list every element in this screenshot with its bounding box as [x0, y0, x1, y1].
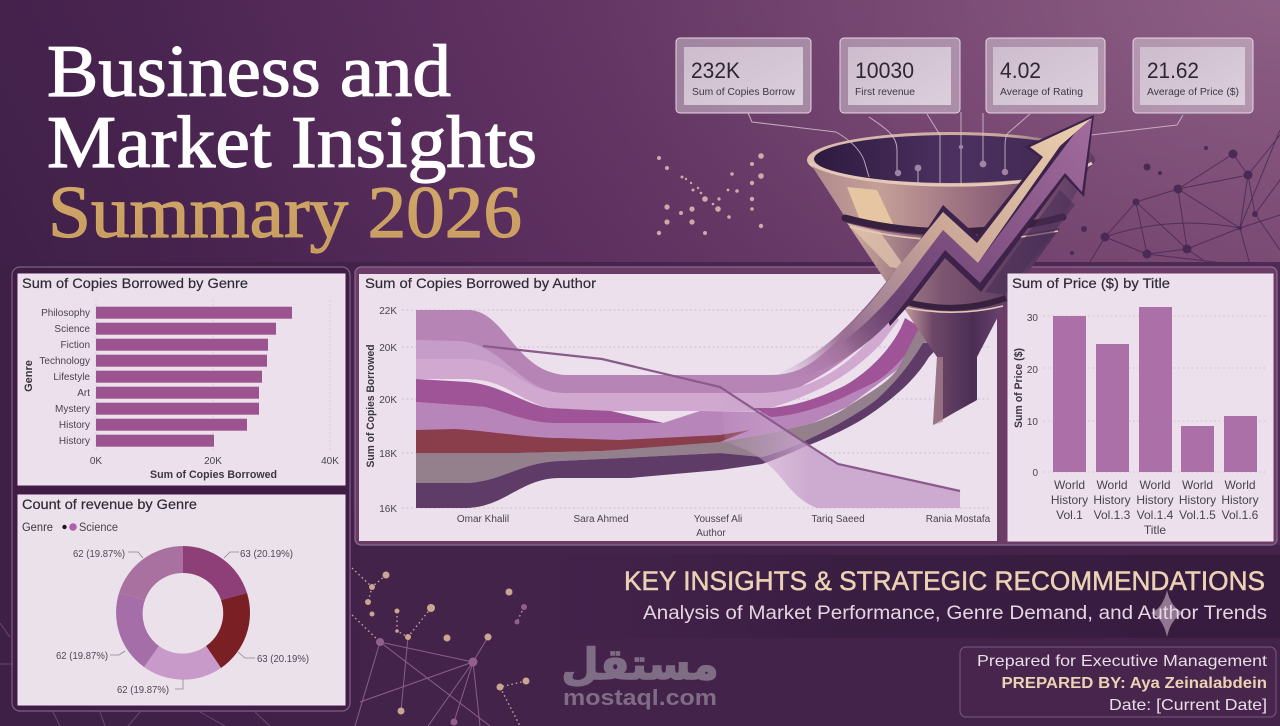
column chart: World — [1096, 478, 1128, 492]
funnel front upper section — [810, 163, 1092, 231]
donut labels: 63 (20.19%) — [257, 653, 309, 665]
legend: Science — [79, 522, 118, 534]
sparkle — [1151, 590, 1184, 637]
key insights heading: KEY INSIGHTS & STRATEGIC RECOMMENDATIONS — [624, 566, 1265, 596]
horizontal bar chart — [23, 300, 339, 481]
column chart: World — [1224, 478, 1256, 492]
KPI: copies borrowed: 232K — [691, 58, 740, 83]
title: Summary 2026 — [48, 172, 522, 254]
horizontal bar chart: Technology — [39, 356, 90, 367]
KPI: average rating: 4.02 — [1000, 58, 1041, 83]
title: Business and — [47, 31, 451, 113]
panel: price by title — [1008, 274, 1273, 541]
watermark: مستقل — [561, 640, 719, 690]
horizontal bar chart: History — [59, 436, 90, 447]
panel: copies borrowed by genre — [18, 274, 345, 485]
column chart: Vol.1.6 — [1222, 508, 1259, 522]
legend — [22, 522, 118, 534]
donut labels: 62 (19.87%) — [73, 548, 125, 560]
horizontal bar chart: Genre — [23, 360, 35, 392]
horizontal bar chart: Philosophy — [41, 308, 90, 319]
horizontal bar chart: 20K — [204, 456, 222, 467]
panel frame: centre and right charts — [355, 267, 1277, 545]
funnel illustration — [807, 132, 1095, 425]
horizontal bar chart: Science — [54, 324, 90, 335]
prepared-by box — [960, 647, 1276, 717]
author chart axes: Author — [696, 528, 726, 539]
author chart axes: 20K — [379, 395, 397, 406]
heading: genre bar chart: Sum of Copies Borrowed by Genre — [22, 275, 248, 291]
column chart: Vol.1.4 — [1137, 508, 1174, 522]
author chart axes — [365, 306, 991, 539]
donut labels: 62 (19.87%) — [56, 650, 108, 662]
column chart: History — [1093, 493, 1131, 507]
author chart axes: Tariq Saeed — [811, 514, 865, 525]
author chart axes: 18K — [379, 449, 397, 460]
trend line — [483, 346, 960, 491]
column chart: World — [1139, 478, 1171, 492]
heading: donut chart: Count of revenue by Genre — [22, 496, 197, 512]
watermark: mostaql.com — [563, 685, 717, 710]
column chart: Title — [1144, 523, 1166, 537]
column chart: Vol.1 — [1056, 508, 1083, 522]
author chart axes: 16K — [379, 504, 397, 515]
column chart: Vol.1.3 — [1094, 508, 1131, 522]
column chart: 30 — [1027, 313, 1038, 324]
column chart — [1013, 307, 1268, 537]
panel: copies borrowed by author — [359, 212, 997, 541]
title — [47, 31, 537, 254]
horizontal bar chart: Fiction — [61, 340, 90, 351]
column chart: History — [1051, 493, 1088, 507]
column chart: World — [1182, 478, 1213, 492]
funnel middle section — [847, 223, 1060, 312]
legend: Genre — [22, 522, 53, 534]
donut labels: 63 (20.19%) — [240, 548, 293, 560]
heading: author chart: Sum of Copies Borrowed by Author — [365, 275, 596, 291]
horizontal bar chart: 40K — [321, 456, 339, 467]
prepared-by box: PREPARED BY: Aya Zeinalabdein — [1002, 675, 1267, 692]
column chart: 10 — [1027, 417, 1038, 428]
column chart: History — [1221, 493, 1259, 507]
KPI: first revenue: First revenue — [855, 86, 915, 98]
author chart axes: 22K — [379, 306, 397, 317]
prepared-by box: Date: [Current Date] — [1109, 697, 1267, 714]
panel: revenue count by genre — [18, 495, 345, 705]
growth arrow — [780, 115, 1094, 390]
pale trailing area — [720, 387, 960, 508]
KPI: average price — [1133, 38, 1253, 113]
horizontal bar chart: Art — [77, 388, 90, 399]
author chart axes: Rania Mostafa — [926, 514, 991, 525]
horizontal bar chart: History — [59, 420, 90, 431]
KPI cards — [676, 38, 1253, 113]
author chart axes: Sum of Copies Borrowed — [365, 344, 377, 468]
column chart: World — [1054, 478, 1085, 492]
column chart: Sum of Price ($) — [1013, 348, 1025, 428]
decorative network bottom center — [352, 568, 530, 726]
decorative dot cluster left of funnel — [657, 153, 764, 235]
KPI: average rating: Average of Rating — [1000, 86, 1083, 98]
author chart axes: 20K — [379, 343, 397, 354]
KPI: copies borrowed: Sum of Copies Borrow — [692, 86, 795, 98]
decorative network top right — [1070, 130, 1280, 265]
KPI: average price: 21.62 — [1147, 58, 1199, 83]
prepared-by box: Prepared for Executive Management — [977, 653, 1268, 670]
column chart: History — [1136, 493, 1174, 507]
donut labels: 62 (19.87%) — [117, 684, 169, 696]
KPI: average price: Average of Price ($) — [1147, 86, 1239, 98]
column chart: 0 — [1032, 468, 1038, 479]
horizontal bar chart: Lifestyle — [53, 372, 90, 383]
column chart: Vol.1.5 — [1179, 508, 1216, 522]
KPI: first revenue: 10030 — [855, 58, 914, 83]
KPI: average rating — [986, 38, 1105, 113]
horizontal bar chart: Sum of Copies Borrowed — [150, 469, 277, 481]
panel frame: left column — [12, 267, 350, 711]
KPI: copies borrowed — [676, 38, 811, 113]
KPI: first revenue — [840, 38, 960, 113]
connector lines from KPI cards — [748, 112, 1183, 184]
column chart: History — [1179, 493, 1216, 507]
ribbon chart — [416, 212, 960, 508]
author chart axes: Sara Ahmed — [573, 514, 629, 525]
title: Market Insights — [47, 102, 537, 184]
horizontal bar chart: 0K — [90, 456, 102, 467]
column chart: 20 — [1027, 365, 1038, 376]
donut chart — [116, 546, 250, 680]
author chart axes: Omar Khalil — [457, 514, 509, 525]
subtitle: Analysis of Market Performance, Genre Demand, and Author Trends — [643, 603, 1267, 624]
horizontal bar chart: Mystery — [55, 404, 90, 415]
funnel neck — [903, 307, 1003, 425]
heading: price chart: Sum of Price ($) by Title — [1012, 275, 1170, 291]
author chart axes: Youssef Ali — [694, 514, 742, 525]
donut labels — [56, 548, 309, 696]
